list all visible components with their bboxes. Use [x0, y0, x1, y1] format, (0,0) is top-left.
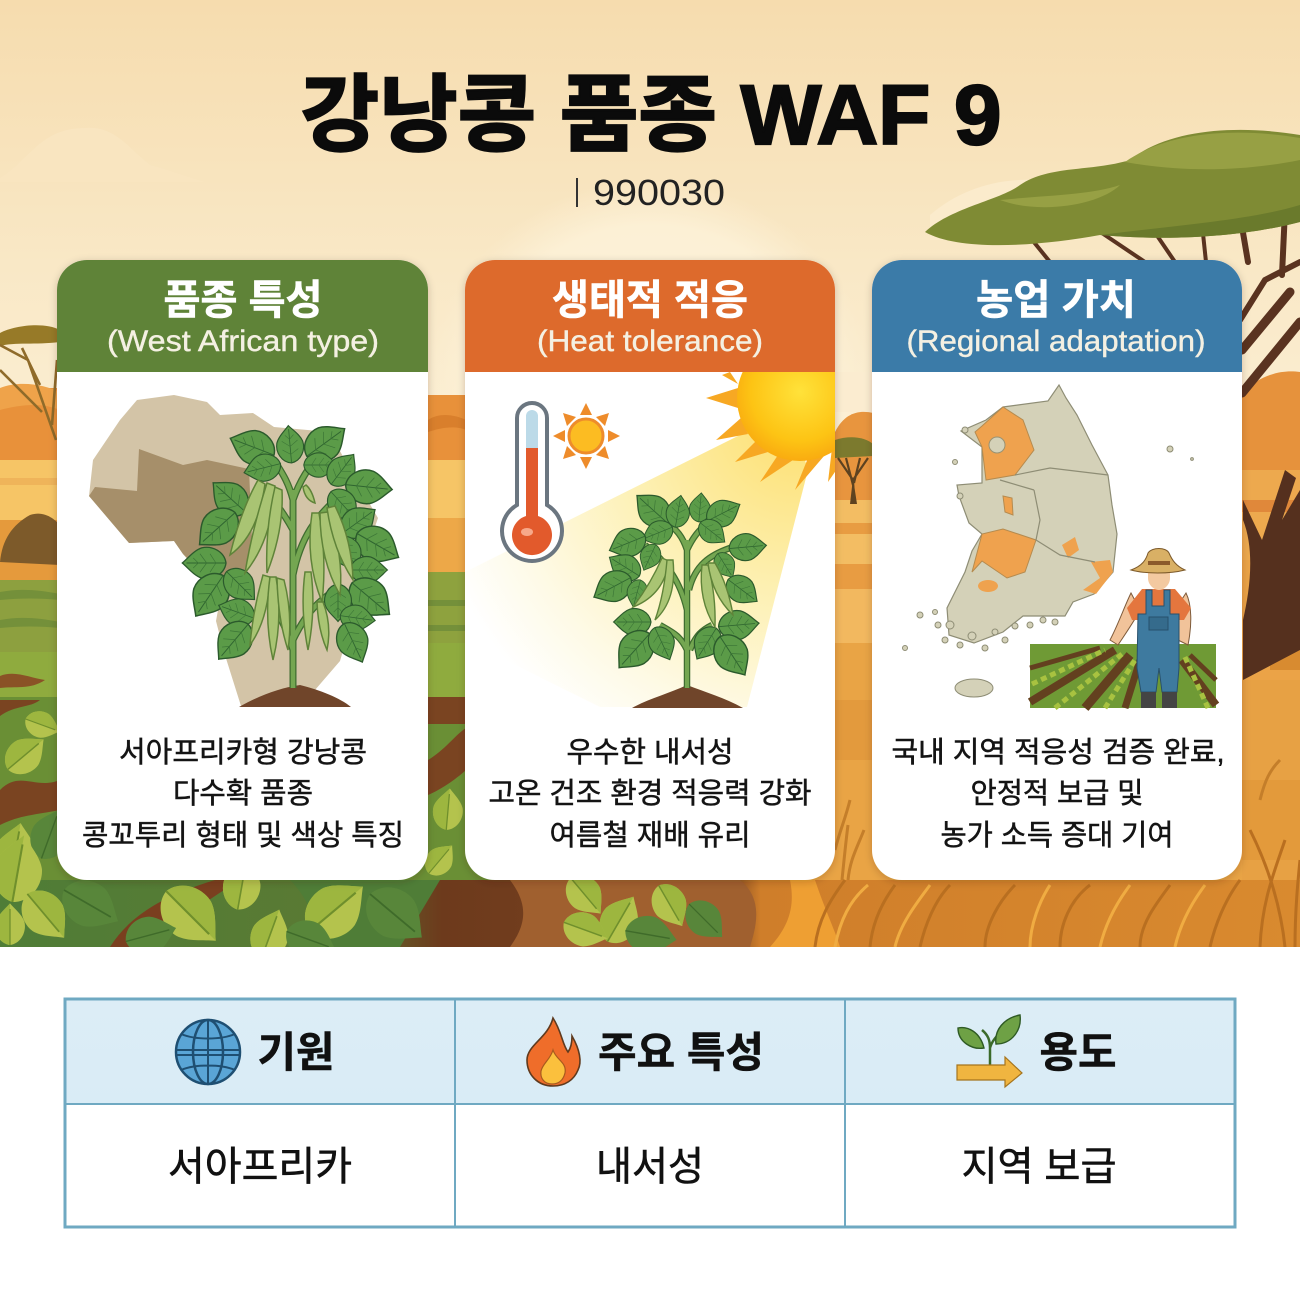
gap strip between first and second panels: [425, 395, 465, 876]
small sun icon: [553, 403, 620, 469]
icon: flame: [527, 1018, 580, 1086]
cell: regional distribution: 지역 보급: [962, 1145, 1116, 1189]
panel header: ecological adaptation: (Heat tolerance): [537, 325, 763, 358]
small acacia between cards: [835, 437, 873, 504]
big acacia canopy: [925, 130, 1300, 245]
crop leaves along the bottom: [0, 836, 722, 947]
panel header: ecological adaptation: [465, 260, 835, 372]
description text: 고온 건조 환경 적응력 강화: [488, 778, 812, 810]
panel header: agricultural value: [872, 260, 1242, 372]
sun with light beam: [477, 372, 835, 707]
icon: sprout with arrow: [957, 1015, 1022, 1087]
panel header: agricultural value: (Regional adaptation): [906, 325, 1206, 358]
description text: 여름철 재배 유리: [550, 820, 750, 852]
gap strip between second and third panels: [835, 412, 872, 760]
description text: [488, 737, 812, 852]
description text: [892, 737, 1224, 852]
description text: 국내 지역 적응성 검증 완료,: [892, 737, 1224, 769]
map of Africa: [89, 395, 378, 706]
panel header: variety traits: 품종 특성: [164, 277, 322, 323]
background landscape: [0, 0, 1300, 967]
bean plant with pods: [181, 415, 407, 707]
icon: globe: [176, 1020, 240, 1084]
header: origin: 기원: [258, 1029, 334, 1076]
variety number: 990030: [593, 172, 725, 213]
bottom ground strip: [0, 880, 1300, 947]
description text: 농가 소득 증대 기여: [940, 819, 1174, 852]
left strip: hills and fields: [0, 384, 58, 859]
description text: 안정적 보급 및: [970, 778, 1144, 810]
bean plant under sun: [587, 484, 768, 708]
cell: heat tolerance: 내서성: [596, 1145, 704, 1189]
panel header: ecological adaptation: 생태적 적응: [552, 277, 748, 323]
thermometer: [502, 403, 562, 561]
header: key trait: 주요 특성: [598, 1029, 764, 1076]
summary table: [65, 999, 1235, 1227]
panel header: variety traits: (West African type): [107, 325, 379, 358]
description text: 우수한 내서성: [566, 737, 734, 769]
big acacia trunk: [1243, 470, 1300, 680]
panel: agricultural value: [872, 260, 1242, 880]
right strip: savanna: [1242, 371, 1300, 860]
description text: [82, 736, 404, 852]
description text: 콩꼬투리 형태 및 색상 특징: [82, 819, 404, 852]
panel: ecological adaptation: [465, 260, 863, 880]
cell: West Africa: 서아프리카: [168, 1145, 352, 1189]
left acacia: [0, 325, 60, 440]
header: use: 용도: [1040, 1029, 1116, 1076]
panel header: agricultural value: 농업 가치: [976, 277, 1136, 323]
big acacia branches: [1032, 225, 1300, 398]
description text: 서아프리카형 강낭콩: [119, 736, 367, 769]
farmer in field: [1030, 548, 1216, 708]
description text: 다수확 품종: [173, 777, 313, 810]
savanna grass: [815, 760, 1300, 947]
title: 강낭콩 품종 WAF 9: [300, 68, 1002, 162]
panel header: variety traits: [57, 260, 428, 372]
panel: variety traits: [57, 260, 428, 880]
map of South Korea: [902, 385, 1193, 697]
